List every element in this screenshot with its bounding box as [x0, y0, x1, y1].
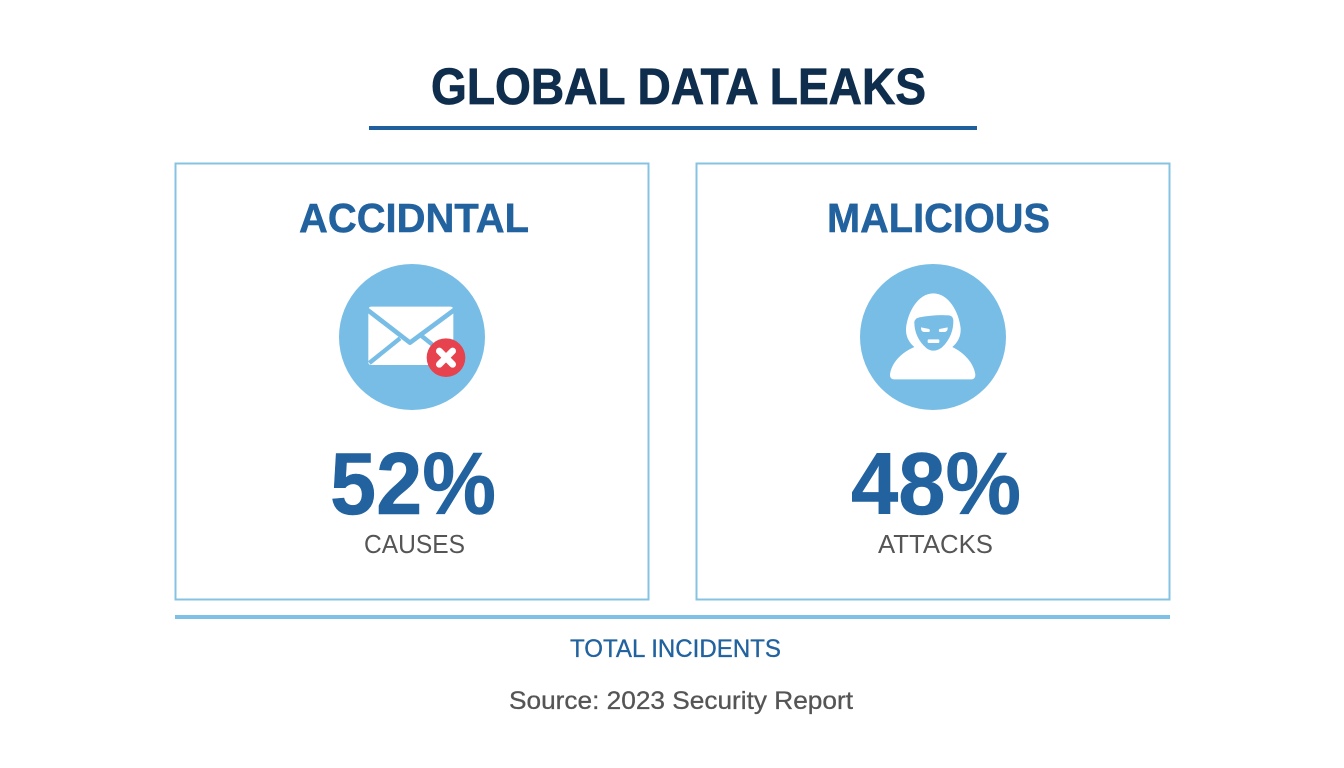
statistic: 48%: 48%: [851, 434, 1021, 533]
title: GLOBAL DATA LEAKS: [431, 58, 926, 115]
panel: malicious: [696, 164, 1170, 600]
source note: Source: 2023 Security Report: [509, 687, 853, 715]
panel heading: MALICIOUS: [827, 195, 1050, 241]
total divider: [175, 615, 1170, 619]
icon: envelope with error badge: [339, 264, 485, 410]
statistic: 52%: 52%: [330, 434, 496, 533]
total incidents label: TOTAL INCIDENTS: [570, 635, 781, 663]
label: causes: CAUSES: [364, 529, 465, 559]
title underline: [369, 126, 977, 130]
icon: hooded hacker: [860, 264, 1006, 410]
panel heading: ACCIDNTAL: [299, 195, 529, 241]
label: attacks: ATTACKS: [878, 529, 993, 559]
panel border: [696, 164, 1170, 600]
panel: accidental: [176, 164, 648, 600]
panel border: [176, 164, 648, 600]
